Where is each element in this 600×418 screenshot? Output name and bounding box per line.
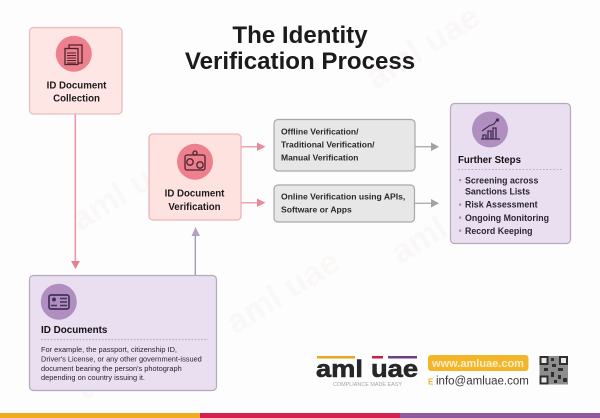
panel: Further Steps bbox=[450, 104, 570, 244]
panel: ID Document Collection bbox=[30, 28, 122, 114]
steps list: Risk Assessment bbox=[465, 200, 538, 210]
description: document bearing the person's photograph bbox=[41, 364, 182, 373]
label: Collection bbox=[53, 94, 100, 104]
logo: aml uae: COMPLIANCE MADE EASY bbox=[333, 382, 403, 388]
label: Verification bbox=[168, 202, 221, 213]
icon: documents bbox=[56, 36, 92, 72]
heading: ID Documents bbox=[41, 325, 108, 336]
steps list bbox=[459, 176, 549, 236]
label: ID Document bbox=[47, 80, 107, 92]
steps list: Ongoing Monitoring bbox=[465, 213, 549, 223]
icon: rising chart bbox=[472, 112, 508, 148]
icon: ID card bbox=[41, 284, 77, 320]
website pill: www.amluae.com bbox=[431, 358, 524, 370]
website pill bbox=[428, 355, 528, 371]
text: aml uae bbox=[359, 0, 487, 97]
title bbox=[185, 22, 415, 75]
panel: online verification: Online Verification using APIs, bbox=[281, 192, 405, 202]
panel: offline verification: Manual Verification bbox=[281, 152, 358, 162]
icon: verification badge bbox=[177, 144, 213, 180]
steps list: Screening across bbox=[465, 176, 538, 186]
arrow: verification to offline bbox=[241, 142, 266, 151]
description: For example, the passport, citizenship ID, bbox=[41, 345, 177, 354]
panel: ID Document Verification bbox=[149, 134, 241, 220]
arrow: collection to ID documents bbox=[71, 114, 80, 269]
logo: aml uae bbox=[316, 356, 418, 388]
text: aml uae bbox=[64, 139, 192, 239]
QR code bbox=[540, 356, 568, 384]
description: Driver's License, or any other government-issued bbox=[41, 354, 202, 363]
arrow: verification to online bbox=[241, 198, 266, 207]
panel: offline verification: Traditional Verification/ bbox=[281, 140, 375, 150]
text: aml uae bbox=[69, 307, 197, 407]
arrow: offline to further steps bbox=[415, 142, 439, 151]
text: aml uae bbox=[219, 242, 347, 342]
title: Verification Process bbox=[185, 48, 415, 75]
email: info@amluae.com bbox=[436, 376, 529, 388]
steps list: Sanctions Lists bbox=[465, 186, 530, 196]
description: depending on country issuing it. bbox=[41, 373, 145, 382]
logo: aml uae: aml bbox=[316, 356, 363, 383]
label: ID Document bbox=[165, 188, 225, 200]
arrow: ID documents to verification bbox=[192, 227, 200, 275]
footer colour bar bbox=[0, 413, 600, 418]
panel: offline verification: Offline Verification/ bbox=[281, 126, 359, 136]
steps list: Record Keeping bbox=[465, 226, 532, 236]
logo: aml uae: uae bbox=[371, 356, 418, 383]
panel: online verification bbox=[274, 185, 414, 222]
heading: Further Steps bbox=[458, 155, 521, 166]
text: aml uae bbox=[384, 172, 512, 272]
email: E bbox=[428, 378, 434, 386]
panel: offline verification bbox=[274, 120, 415, 171]
panel: ID Documents bbox=[30, 276, 216, 390]
title: The Identity bbox=[232, 22, 368, 49]
arrow: online to further steps bbox=[415, 199, 439, 208]
panel: online verification: Software or Apps bbox=[281, 204, 352, 214]
